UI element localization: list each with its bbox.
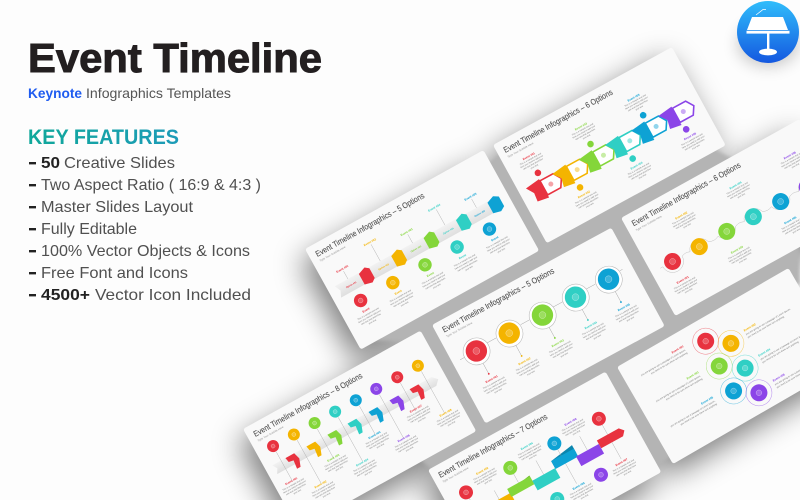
event markers: Event #01 <box>522 151 536 161</box>
ring labels: you are going to use a passage of Lorem Ipsum, <box>640 348 687 377</box>
event labels: here you need to add your <box>474 469 498 484</box>
event labels: here you need to add your <box>325 456 349 471</box>
circle timeline: here you need to add your <box>516 360 540 375</box>
event labels: Event #05 <box>368 430 382 440</box>
wave timeline: Event #06 <box>783 150 797 160</box>
event labels and markers: your text <box>368 318 377 325</box>
event labels: your text <box>528 453 538 460</box>
circle timeline: own text that describes <box>486 381 508 395</box>
wave timeline: Event #04 <box>729 180 743 190</box>
circle timeline: here you need to add your <box>483 378 507 393</box>
event labels: here you need to add your <box>395 437 419 452</box>
event markers: own text that describes <box>684 138 706 151</box>
ring labels: Event #03 <box>686 370 700 380</box>
feature list: Two Aspect Ratio ( 16:9 & 4:3 ) <box>41 177 261 194</box>
event markers: own text that describes <box>627 99 649 112</box>
event labels: This is a sample text and <box>353 458 376 473</box>
event markers: Event #02 <box>577 189 591 199</box>
ring labels: Event #02 <box>743 322 757 332</box>
event markers: your text <box>585 202 595 209</box>
panel: slide 5 options bar: Event Timeline Infographics – 5 Options <box>314 191 426 259</box>
circle timeline: your text <box>527 370 536 376</box>
event labels: Event #06 <box>397 433 411 443</box>
circle timeline: This is a sample text and <box>549 340 572 354</box>
event labels and markers: Event #05 <box>464 192 478 202</box>
event labels: This is a sample text and <box>282 477 305 492</box>
event labels: This is a sample text and <box>394 434 418 449</box>
panel: slide 8 options: Type Your Subtitle Here <box>257 425 285 443</box>
event labels <box>460 402 640 500</box>
event labels and markers <box>326 180 513 329</box>
ring labels: you are going to use a passage of Lorem Ipsum, <box>670 400 716 428</box>
event labels: This is a sample text and <box>324 454 347 469</box>
wave timeline: This is a sample text and <box>728 246 751 260</box>
event labels and markers: Event #04 <box>427 202 441 213</box>
event labels: here you need to add your <box>613 461 637 476</box>
panel: slide 5 options bar <box>305 150 539 350</box>
event labels: your text <box>376 442 385 449</box>
event markers: own text that describes <box>575 127 597 141</box>
wave timeline: This is a sample text and <box>672 211 695 226</box>
event labels and markers: own text that describes <box>361 312 382 326</box>
event labels: Event #03 <box>326 453 341 463</box>
event labels: here you need to add your <box>570 484 594 499</box>
event labels: own text that describes <box>410 410 432 424</box>
event labels: here you need to add your <box>407 407 431 422</box>
event markers: Event #03 <box>574 121 588 132</box>
3d bar: Option #01 <box>345 281 358 289</box>
circle timeline: your text <box>560 352 569 358</box>
event labels: your text <box>364 470 373 477</box>
event markers: This is a sample text and <box>571 122 595 137</box>
event labels: your text <box>405 446 414 452</box>
event labels: your text <box>417 416 427 423</box>
circle timeline: This is a sample text and <box>582 322 605 336</box>
event labels: This is a sample text and <box>517 442 541 457</box>
circles <box>456 409 633 500</box>
event markers: Event #06 <box>683 131 697 141</box>
ring labels: you need to be sure there isn't anything <box>650 351 689 375</box>
event markers: This is a sample text and <box>627 162 650 176</box>
event labels: your text <box>580 493 589 500</box>
circle timeline: Event #03 <box>551 338 565 348</box>
circle timeline: your text <box>626 316 635 323</box>
panel: slide 6 options arrows: Event Timeline Infographics – 6 Options <box>502 88 614 155</box>
ring labels: Event #06 <box>772 372 786 383</box>
circle timeline: This is a sample text and <box>482 376 506 390</box>
3d bar <box>334 194 506 299</box>
circle timeline: your text <box>494 387 503 394</box>
wave timeline <box>642 147 800 299</box>
wave timeline: here you need to add your <box>674 278 698 293</box>
wave timeline: Event #01 <box>676 275 690 285</box>
panel: slide 6 options arrows <box>493 47 726 243</box>
feature list: Fully Editable <box>41 221 137 238</box>
panel: slide 6 options circles <box>621 119 800 316</box>
wave timeline: here you need to add your <box>672 213 697 228</box>
event labels: This is a sample text and <box>612 458 635 473</box>
event labels: own text that describes <box>398 440 420 453</box>
event markers: This is a sample text and <box>681 132 704 147</box>
event labels and markers: Event #01 <box>335 264 350 274</box>
ring cluster <box>687 313 777 421</box>
wave timeline: your text <box>737 192 746 199</box>
ring labels: Event #05 <box>700 395 714 406</box>
event labels and markers: Event <box>362 306 370 314</box>
event labels and markers: here you need to add your <box>487 238 511 253</box>
wave timeline: your text <box>739 257 748 264</box>
panel: slide 8 options: Event Timeline Infographics – 8 Options <box>252 371 364 439</box>
event markers: This is a sample text and <box>574 190 598 205</box>
event labels: Event #05 <box>572 481 586 491</box>
event labels: Event #07 <box>409 403 423 414</box>
ring labels: you are going to use a passage of Lorem Ipsum, <box>655 374 702 403</box>
3d bar: Option #04 <box>442 227 455 235</box>
event labels and markers: This is a sample text and <box>453 253 477 268</box>
wave timeline: own text that describes <box>675 216 697 230</box>
event labels: Event #06 <box>564 417 578 427</box>
event labels and markers: Event <box>394 289 403 296</box>
event labels: your text <box>623 470 632 476</box>
event labels and markers: your text <box>465 265 474 272</box>
event labels: This is a sample text and <box>561 418 584 433</box>
panel: slide ring cluster <box>617 268 800 464</box>
panel: slide 5 options circles: Event Timeline Infographics – 5 Options <box>441 266 556 334</box>
circle timeline: Event #02 <box>518 356 532 366</box>
3d bar: Option #03 <box>410 245 423 253</box>
slide shadows <box>238 57 800 500</box>
event markers: This is a sample text and <box>519 152 542 166</box>
event labels: This is a sample text and <box>569 482 593 497</box>
event markers: Event #05 <box>627 93 641 103</box>
event markers: own text that describes <box>578 196 600 210</box>
ring labels: you need to be sure there isn't anything <box>665 377 704 401</box>
event labels: Event #04 <box>520 441 534 451</box>
circle timeline: here you need to add your <box>549 342 573 357</box>
panel: slide 5 options bar: Type Your Subtitle Here <box>319 245 347 263</box>
event labels and markers: your text <box>497 247 506 254</box>
event labels: Event #08 <box>439 408 453 418</box>
event labels: here you need to add your <box>437 411 461 426</box>
circle timeline: own text that describes <box>552 345 574 359</box>
event markers <box>516 75 708 227</box>
event labels: your text <box>293 488 302 495</box>
icon: keynote logo <box>737 1 799 66</box>
event labels: own text that describes <box>565 423 586 437</box>
wave timeline: own text that describes <box>731 251 753 265</box>
circle timeline: This is a sample text and <box>515 358 539 372</box>
panel: slide 7 options: Type Your Subtitle Here <box>442 466 470 484</box>
event labels: Event #01 <box>284 476 299 486</box>
wave timeline: This is a sample text and <box>673 276 697 291</box>
3d bar: Option #02 <box>378 263 390 271</box>
title: Event Timeline <box>28 35 322 81</box>
wave timeline: own text that describes <box>677 281 699 295</box>
event markers: your text <box>638 173 647 180</box>
event markers: own text that describes <box>631 167 652 181</box>
ring labels: you need to be sure there isn't anything <box>762 340 800 364</box>
event labels: own text that describes <box>476 472 498 486</box>
ring labels: you need to be sure there isn't anything <box>680 402 718 426</box>
event labels: here you need to add your <box>354 461 378 476</box>
event labels: This is a sample text and <box>311 480 334 495</box>
event labels: here you need to add your <box>312 483 336 498</box>
panel: slide 6 options circles: Type Your Subtitle Here <box>635 214 663 232</box>
event labels and markers: here you need to add your <box>358 309 382 324</box>
event labels: Event #04 <box>355 457 369 467</box>
event labels and markers: here you need to add your <box>422 273 446 288</box>
circle timeline: Event #04 <box>584 320 598 330</box>
wave timeline: Event #05 <box>783 215 798 225</box>
event labels and markers: own text that describes <box>393 294 415 308</box>
wave timeline: your text <box>791 162 800 169</box>
circle timeline: own text that describes <box>519 363 541 377</box>
ribbons <box>460 419 629 500</box>
circle timeline: here you need to add your <box>615 306 640 321</box>
event labels and markers: Event #02 <box>363 237 377 247</box>
event labels: your text <box>572 429 581 436</box>
feature list <box>29 155 261 304</box>
circle timeline <box>454 260 646 401</box>
event labels: here you need to add your <box>366 433 390 449</box>
event labels <box>278 389 465 500</box>
wave timeline: own text that describes <box>729 186 751 200</box>
event markers: your text <box>530 163 539 170</box>
wave timeline: This is a sample text and <box>726 181 749 196</box>
event labels and markers: own text that describes <box>489 241 511 255</box>
panel: slide 7 options <box>428 372 661 500</box>
ring labels: Event #04 <box>757 347 771 358</box>
event markers: here you need to add your <box>572 124 596 139</box>
heading: key features: KEY FEATURES <box>28 126 179 149</box>
event markers: own text that describes <box>523 157 544 171</box>
event labels: own text that describes <box>315 486 337 499</box>
event labels and markers: your text <box>400 301 409 307</box>
wave timeline: Event #03 <box>730 245 744 255</box>
gaps between slides <box>262 62 800 495</box>
event labels: your text <box>447 420 456 427</box>
panel: slide 6 options arrows: Type Your Subtitle Here <box>507 141 535 159</box>
event markers: here you need to add your <box>520 154 544 169</box>
event labels: own text that describes <box>440 414 461 428</box>
event labels: your text <box>322 492 331 499</box>
event markers: your text <box>582 133 591 140</box>
event labels and markers: Event <box>458 253 467 260</box>
circle timeline: Event #01 <box>485 374 499 384</box>
feature list: 100% Vector Objects & Icons <box>41 243 250 260</box>
event labels and markers: here you need to add your <box>390 291 414 306</box>
event labels: own text that describes <box>285 482 307 496</box>
event labels and markers: here you need to add your <box>454 256 478 271</box>
ring labels <box>638 288 800 445</box>
3d bar: Option #05 <box>474 209 486 218</box>
event labels and markers: This is a sample text and <box>486 235 509 250</box>
circle timeline: own text that describes <box>585 327 607 341</box>
event labels and markers: own text that describes <box>425 276 447 290</box>
event labels and markers: your text <box>432 283 442 290</box>
event labels: This is a sample text and <box>436 409 459 423</box>
event markers: your text <box>635 105 644 111</box>
event labels: own text that describes <box>616 463 637 477</box>
ring labels: Event #01 <box>671 344 685 354</box>
event labels: here you need to add your <box>562 420 586 435</box>
ring labels: you are going to use a passage of Lorem Ipsum, <box>745 307 792 336</box>
event markers: here you need to add your <box>628 164 652 179</box>
event markers: here you need to add your <box>625 96 649 111</box>
circle timeline: your text <box>593 334 602 340</box>
event labels: own text that describes <box>356 464 378 478</box>
event labels: own text that describes <box>369 436 390 450</box>
circle timeline: Event #05 <box>617 302 631 312</box>
panel: slide 7 options: Event Timeline Infographics – 7 Options <box>437 412 549 480</box>
wave timeline: your text <box>684 287 693 294</box>
wave timeline: here you need to add your <box>727 183 751 198</box>
subtitle: Infographics Templates <box>86 85 231 101</box>
panel: slide 6 options circles: Event Timeline Infographics – 6 Options <box>630 161 742 228</box>
feature list: Master Slides Layout <box>41 199 194 216</box>
event markers: here you need to add your <box>575 193 599 208</box>
circle timeline: own text that describes <box>618 309 640 323</box>
event labels and markers: This is a sample text and <box>421 271 445 286</box>
event labels and markers: This is a sample text and <box>389 289 412 303</box>
feature list: 50 <box>41 155 60 172</box>
wave timeline: Event #02 <box>674 210 689 220</box>
event labels: Event #07 <box>615 457 629 467</box>
circle timeline: here you need to add your <box>582 324 607 339</box>
event labels: This is a sample text and <box>406 405 430 419</box>
panel: slide 5 options circles <box>432 228 665 423</box>
event labels: Event #02 <box>475 466 489 476</box>
event labels and markers: Event <box>490 235 499 242</box>
event labels: your text <box>335 465 344 472</box>
event labels and markers: own text that describes <box>457 259 479 273</box>
event labels and markers: Event <box>426 271 435 278</box>
event labels: This is a sample text and <box>473 467 496 482</box>
event labels: here you need to add your <box>283 479 307 495</box>
panel: slide 5 options circles: Type Your Subtitle Here <box>445 321 473 338</box>
event markers: This is a sample text and <box>624 93 647 108</box>
feature list: Free Font and Icons <box>41 265 188 282</box>
event labels: own text that describes <box>327 459 349 473</box>
feature list: Creative Slides <box>64 155 175 172</box>
wave timeline: your text <box>683 222 692 229</box>
event labels and markers: This is a sample text and <box>357 306 380 321</box>
feature list: Vector Icon Included <box>95 287 251 304</box>
wave timeline: here you need to add your <box>728 248 752 263</box>
arrow bar <box>267 366 455 500</box>
event markers: Event #04 <box>630 160 644 171</box>
top circles <box>265 358 426 454</box>
event markers: your text <box>692 144 701 151</box>
panel: slide 8 options <box>243 331 476 500</box>
ring labels: you need to be sure there isn't anything <box>747 315 785 339</box>
event labels: your text <box>484 478 493 485</box>
event labels: here you need to add your <box>518 444 542 460</box>
event labels: This is a sample text and <box>365 431 388 446</box>
circle timeline: This is a sample text and <box>615 304 638 318</box>
event labels: Event #02 <box>314 479 328 489</box>
feature list: 4500+ <box>41 287 90 304</box>
chevron timeline <box>525 97 699 205</box>
event markers: here you need to add your <box>681 135 705 150</box>
event labels and markers: Event #03 <box>400 227 414 237</box>
event labels: own text that describes <box>521 447 543 461</box>
subtitle: Keynote <box>28 85 82 101</box>
